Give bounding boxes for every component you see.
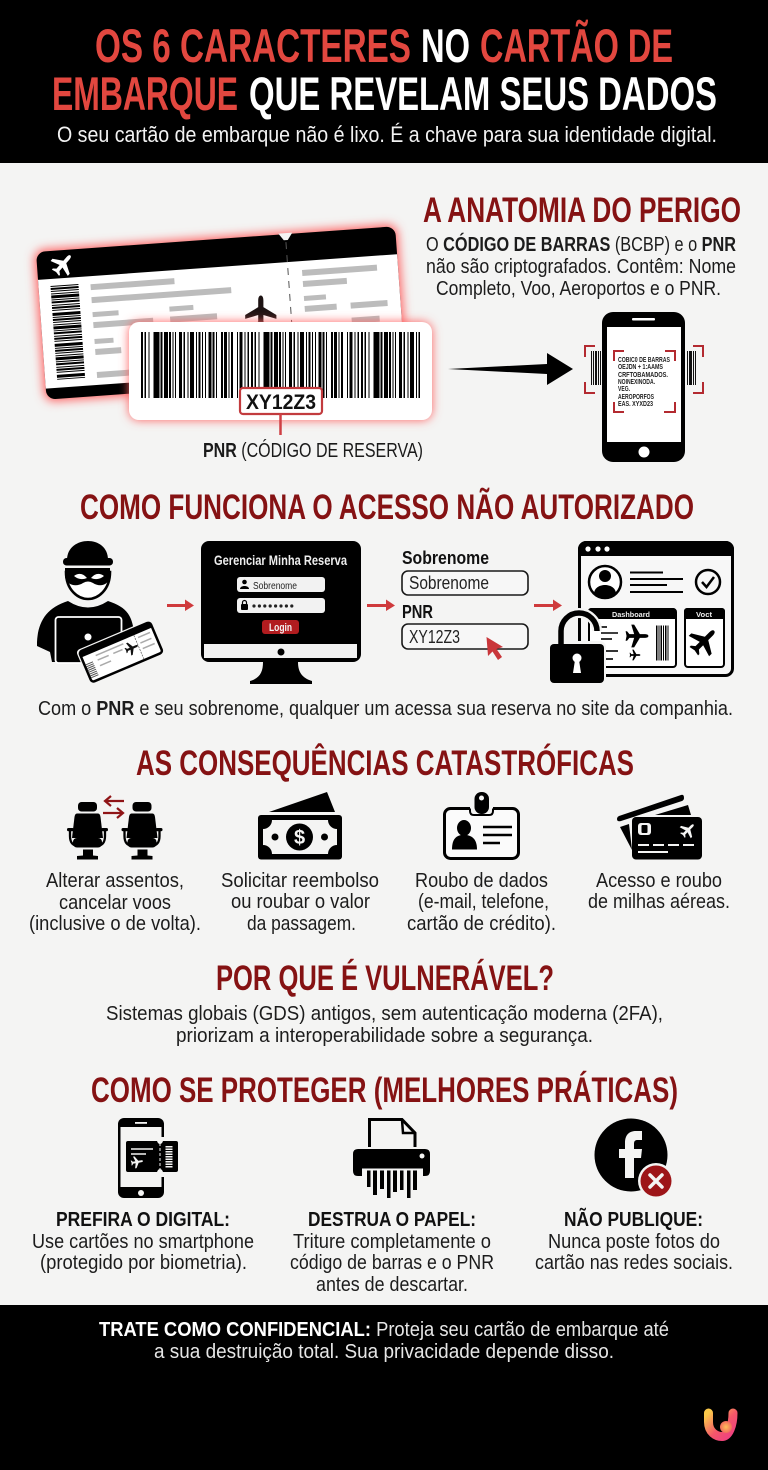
arrow to phone: [448, 353, 573, 385]
title: NO: [421, 20, 470, 73]
phone scanning: NOINEXINODA.: [618, 379, 655, 386]
anatomy description: O CÓDIGO DE BARRAS (BCBP) e o PNR: [426, 232, 736, 256]
consequence 3 text: (e-mail, telefone,: [418, 890, 549, 913]
monitor login screen: Gerenciar Minha Reserva: [214, 553, 347, 568]
vulnerability text: [106, 1002, 663, 1047]
footer text: a sua destruição total. Sua privacidade depende disso.: [154, 1341, 614, 1363]
consequence 2 text: Solicitar reembolso: [221, 869, 379, 892]
footer text: [99, 1319, 669, 1363]
tip 2 text: [290, 1209, 494, 1296]
tip 3 text: [535, 1208, 733, 1274]
small ticket: [76, 619, 166, 686]
title: OS 6 CARACTERES: [95, 20, 411, 73]
tip 2 text: antes de descartar.: [316, 1273, 468, 1296]
icon: phone with ticket: [118, 1118, 178, 1198]
form fields: Sobrenome: [409, 573, 489, 593]
title: [52, 19, 717, 121]
PNR code box: XY12Z3: [246, 391, 316, 414]
icon: hacker with ticket: [37, 541, 166, 686]
tip 1 text: (protegido por biometria).: [40, 1251, 247, 1274]
cursor: [486, 637, 503, 660]
tip 1 text: PREFIRA O DIGITAL:: [56, 1209, 230, 1231]
vulnerability text: Sistemas globais (GDS) antigos, sem autenticação moderna (2FA),: [106, 1002, 663, 1025]
arrow 2: [367, 600, 395, 611]
consequence 3 text: Roubo de dados: [415, 869, 548, 892]
icon: shredder: [353, 1120, 430, 1198]
voct panel: [684, 608, 725, 667]
consequence 3 text: cartão de crédito).: [407, 912, 556, 935]
voct panel: Voct: [696, 610, 713, 619]
phone scanning: COBIC0 DE BARRAS: [618, 357, 670, 364]
login button: [262, 620, 299, 634]
phone scanning: CRFTOBAMADOS.: [618, 372, 668, 379]
tip 1 text: [32, 1209, 254, 1274]
tip 1 text: Use cartões no smartphone: [32, 1230, 254, 1253]
consequence 4 text: Acesso e roubo: [596, 869, 722, 892]
heading: vulnerável: POR QUE É VULNERÁVEL?: [216, 958, 554, 998]
tip 2 text: DESTRUA O PAPEL:: [308, 1209, 476, 1231]
anatomy description: [426, 232, 736, 300]
surname field: Sobrenome: [253, 580, 297, 592]
phone scanning: VEG.: [618, 386, 630, 393]
tip 2 text: código de barras e o PNR: [290, 1251, 494, 1274]
consequence 2 text: da passagem.: [247, 912, 356, 935]
arrow 1: [167, 600, 194, 611]
icon: credit cards with miles: [617, 795, 702, 860]
phone scanning: EAS. XYXD23: [618, 401, 653, 408]
consequence 1 text: (inclusive o de volta).: [29, 912, 201, 935]
tip 2 text: Triture completamente o: [293, 1230, 491, 1253]
consequence 3 text: [407, 869, 556, 935]
footer text: TRATE COMO CONFIDENCIAL: Proteja seu cartão de embarque até: [99, 1319, 669, 1341]
form fields: [402, 548, 528, 660]
icon: seats swap: [67, 796, 162, 860]
login button: Login: [269, 622, 292, 634]
icon: id badge: [444, 792, 518, 858]
icon: money: [258, 792, 342, 860]
form fields: Sobrenome: [402, 548, 489, 568]
tip 3 text: NÃO PUBLIQUE:: [564, 1208, 703, 1231]
consequence 2 text: ou roubar o valor: [231, 890, 370, 913]
footer band: [0, 1305, 768, 1470]
header band: [0, 0, 768, 163]
dashboard panel: Dashboard: [612, 610, 650, 619]
tip 3 text: cartão nas redes sociais.: [535, 1251, 733, 1274]
title: CARTÃO DE: [480, 19, 673, 73]
anatomy description: Completo, Voo, Aeroportos e o PNR.: [436, 277, 721, 300]
consequence 1 text: cancelar voos: [59, 891, 171, 914]
consequence 4 text: [588, 869, 730, 913]
barcode magnified card: [129, 322, 432, 435]
logo: [708, 1413, 733, 1436]
surname field: [237, 577, 325, 592]
monitor login screen: [201, 541, 361, 684]
tip 3 text: Nunca poste fotos do: [548, 1230, 720, 1253]
consequence 2 text: [221, 869, 379, 935]
form fields: XY12Z3: [409, 627, 460, 647]
vulnerability text: priorizam a interoperabilidade sobre a segurança.: [176, 1024, 593, 1047]
browser dashboard: [578, 541, 734, 676]
boarding pass ticket: [34, 224, 408, 402]
PNR caption: PNR (CÓDIGO DE RESERVA): [203, 439, 423, 462]
icon: facebook crossed: [594, 1118, 674, 1199]
title: EMBARQUE: [52, 68, 238, 121]
swap arrows: [103, 796, 124, 818]
phone scanning: AEROPORFOS: [618, 394, 654, 401]
dashboard panel: [588, 608, 676, 667]
icon: open padlock: [547, 613, 606, 686]
seat left: [67, 802, 108, 860]
form fields: PNR: [402, 602, 433, 622]
phone scanning: OEJDN + 1:AAMS: [618, 364, 663, 371]
avatar: [589, 566, 621, 598]
seat right: [122, 802, 162, 860]
consequence 4 text: de milhas aéreas.: [588, 890, 730, 913]
icon: money: $: [294, 827, 305, 849]
phone scanning: [585, 312, 703, 462]
consequence 1 text: Alterar assentos,: [46, 869, 184, 892]
consequence 1 text: [29, 869, 201, 935]
password field: [237, 598, 325, 613]
check icon: [696, 570, 720, 594]
arrow 3: [534, 600, 562, 611]
